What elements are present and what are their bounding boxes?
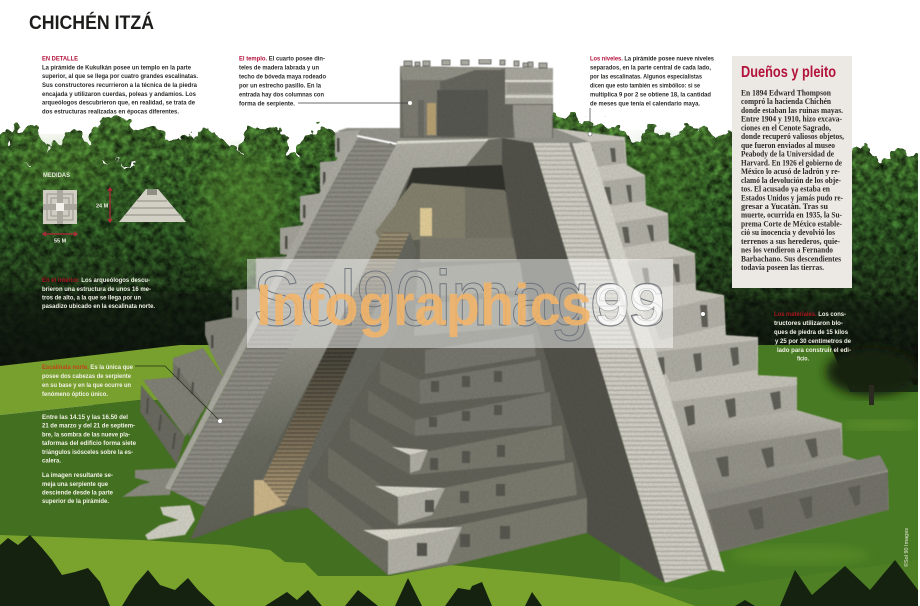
panel body: ciones en el Cenote Sagrado, (741, 123, 831, 132)
panel body: Barbachano. Sus descendientes (741, 254, 841, 263)
panel body: Peabody de la Universidad de (741, 150, 834, 159)
text block: los materiales: ficio. (797, 356, 809, 362)
interior cavity (405, 165, 506, 192)
text block: en detalle: arqueólogos descubrieron que, en realidad, se trata de (42, 100, 195, 106)
lawn: shaded base (0, 400, 640, 606)
marker: materials (701, 312, 705, 316)
text block: escalinata norte: 21 de marzo y del 21 de septiem- (42, 423, 135, 430)
panel body: nes los vendieron a Fernando (741, 246, 833, 255)
right stairs (533, 142, 725, 583)
panel body (741, 88, 844, 272)
text block: escalinata norte (42, 364, 136, 505)
leader line: levels (588, 108, 592, 136)
text block: el templo (239, 56, 326, 108)
text block: el templo: forma de serpiente. (239, 100, 295, 108)
right wall in shade (502, 138, 665, 583)
foreground bushes (0, 535, 918, 606)
text block: escalinata norte: Escalinata norte. Es la única que (42, 364, 133, 371)
cut wall (190, 138, 502, 540)
text block: en el interior: brieron una estructura de unos 16 me- (42, 286, 151, 293)
panel body: tos. El acusado ya estaba en (741, 184, 831, 194)
text block: en el interior: tros de alto, a la que se llega por un (42, 294, 141, 302)
leader line: north stairway (135, 366, 222, 423)
text block: el templo: teles de madera labrada y un (239, 64, 319, 72)
tier 4 (368, 390, 552, 436)
text block: en el interior (42, 277, 155, 310)
interior tiers (308, 238, 587, 575)
text block: escalinata norte: en su base y en la que ocurre un (42, 382, 131, 389)
grey wall beside tunnel (254, 232, 420, 516)
title: CHICHÉN ITZÁ (29, 12, 154, 34)
roof ornaments (404, 59, 547, 68)
panel body: muerte, ocurrida en 1935, la Su- (741, 211, 842, 220)
temple (400, 59, 553, 138)
panel body: clamó la devolución de los obje- (741, 176, 841, 185)
text block: en detalle: encajada y utilizaron cuerdas, poleas y andamios. Los (42, 91, 196, 98)
text block: en detalle: dos estructuras realizadas en épocas diferentes. (42, 108, 179, 116)
text block: los niveles: Los niveles. La pirámide posee nueve niveles (590, 56, 714, 62)
text block: escalinata norte: bre, la sombra de las nueve pla- (42, 432, 130, 438)
width label: 55 M (54, 238, 67, 244)
panel body: Estados Unidos y jamás pudo re- (741, 193, 843, 202)
text block: en detalle (42, 56, 198, 116)
right page edge (918, 0, 920, 606)
text block: el templo: por un estrecho pasillo. En la (239, 82, 321, 90)
panel body: donde recuperó valiosos objetos, (741, 132, 844, 141)
text block: los niveles: dicen que esto también es simbólico: si se (590, 82, 700, 90)
watermark white digits: 99 (594, 273, 665, 338)
text block: en el interior: pasadizo ubicado en la escalinata norte. (42, 303, 155, 310)
tier 5 (380, 360, 545, 404)
panel body: ció su inocencia y devolvió los (741, 228, 835, 237)
tier 1 (308, 478, 587, 575)
credit: ©Sol 90 Images (903, 528, 910, 567)
text block: escalinata norte: superior de la pirámide. (42, 498, 109, 505)
icon: pyramid plan (43, 190, 77, 224)
serpent heads (122, 468, 195, 540)
text block: el templo: El templo. El cuarto posee din- (239, 56, 325, 62)
text block: escalinata norte: triángulos isósceles sobre la es- (42, 449, 133, 456)
text block: los niveles: de meses que tenía el calendario maya. (590, 100, 700, 108)
panel body: todavía poseen las tierras. (741, 263, 824, 272)
tier slab (420, 238, 517, 262)
text block: el templo: entrada hay dos columnas con (239, 92, 324, 98)
lawn: bottom lit (0, 535, 700, 606)
text block: los materiales: Los materiales. Los cons- (774, 311, 846, 318)
text block: escalinata norte: Entre las 14.15 y las 16.50 del (42, 414, 128, 421)
panel: dueños y pleito (732, 56, 852, 288)
tier 8 (416, 262, 524, 298)
tier 6 (425, 334, 536, 374)
text block: los materiales: y 25 por 30 centímetros de (775, 338, 851, 345)
interior: top chamber (375, 183, 512, 240)
text block: escalinata norte: taformas del edificio forma siete (42, 440, 136, 447)
text block: los materiales: ques de piedra de 15 kilos (774, 329, 848, 336)
text block: en detalle: EN DETALLE (42, 56, 79, 62)
text block: escalinata norte: posee dos cabezas de serpiente (42, 373, 131, 380)
panel body: que fueron enviados al museo (741, 141, 835, 150)
icon: pyramid elevation (119, 189, 186, 222)
panel body: terrenos a sus herederos, quie- (741, 237, 840, 246)
tunnel stairs (254, 232, 410, 516)
text block: el templo: techo de bóveda maya rodeado (239, 74, 326, 80)
text block: los niveles: por las escalinatas. Algunos especialistas (590, 74, 702, 80)
medidas diagram (43, 172, 186, 244)
platform top (337, 128, 625, 145)
tiers base (308, 238, 587, 575)
pyramid (122, 59, 889, 583)
text block: escalinata norte: fenómeno óptico único. (42, 391, 108, 398)
lawn: left lit band (0, 345, 260, 415)
text block: escalinata norte: desciende desde la parte (42, 490, 113, 496)
text block: en el interior: En el interior. Los arqueólogos descu- (42, 277, 150, 284)
medidas label: MEDIDAS (43, 172, 71, 179)
text block: los materiales (774, 311, 851, 362)
panel heading: Dueños y pleito (741, 64, 836, 81)
text block: los niveles: multiplica 9 por 2 se obtiene 18, la cantidad (590, 92, 711, 98)
text block: en detalle: La pirámide de Kukulkán posee un templo en la parte (42, 64, 191, 72)
pyramid base mass (205, 138, 587, 575)
panel body: Harvard. En 1926 el gobierno de (741, 158, 842, 167)
panel body: Entre 1904 y 1910, hizo excava- (741, 115, 842, 124)
text block: los niveles: separados, en la parte central de cada lado, (590, 64, 711, 72)
panel body: compró la hacienda Chichén (741, 97, 832, 106)
text block: los materiales: lado para construir el edi- (777, 347, 851, 354)
panel body: prema Corte de México estable- (741, 220, 842, 228)
right terraces (553, 128, 889, 570)
text block: escalinata norte: calera. (42, 458, 61, 464)
panel body: gresar a Yucatán. Tras su (741, 202, 829, 211)
left stairs (165, 134, 397, 507)
left terraces (140, 130, 360, 465)
tier 7 (414, 296, 530, 336)
watermark orange text: Infographics (256, 273, 592, 338)
arrow: height (108, 188, 112, 222)
tier 2 (328, 447, 577, 526)
text block: los niveles (590, 56, 714, 108)
panel body: México lo acusó de ladrón y re- (741, 167, 840, 176)
panel body: donde estaban las ruinas mayas. (741, 106, 843, 115)
text block: en detalle: superior, al que se llega por cuatro grandes escalinatas. (42, 73, 198, 80)
text block: escalinata norte: La imagen resultante se- (42, 472, 113, 479)
text block: en detalle: Sus constructores recurrieron a la técnica de la piedra (42, 82, 197, 89)
tier 3 (350, 417, 565, 475)
watermark outline text: Sol90images (253, 254, 665, 342)
watermark band (247, 254, 673, 348)
text block: los materiales: tructores utilizaron blo- (774, 320, 843, 327)
arrow: width (43, 232, 77, 236)
panel body: En 1894 Edward Thompson (741, 88, 832, 98)
leader line: temple (298, 101, 412, 105)
lawn: right (620, 345, 918, 606)
tree: right foreground (826, 348, 918, 405)
height label: 24 M (96, 204, 109, 210)
text block: escalinata norte: meja una serpiente que (42, 481, 108, 488)
